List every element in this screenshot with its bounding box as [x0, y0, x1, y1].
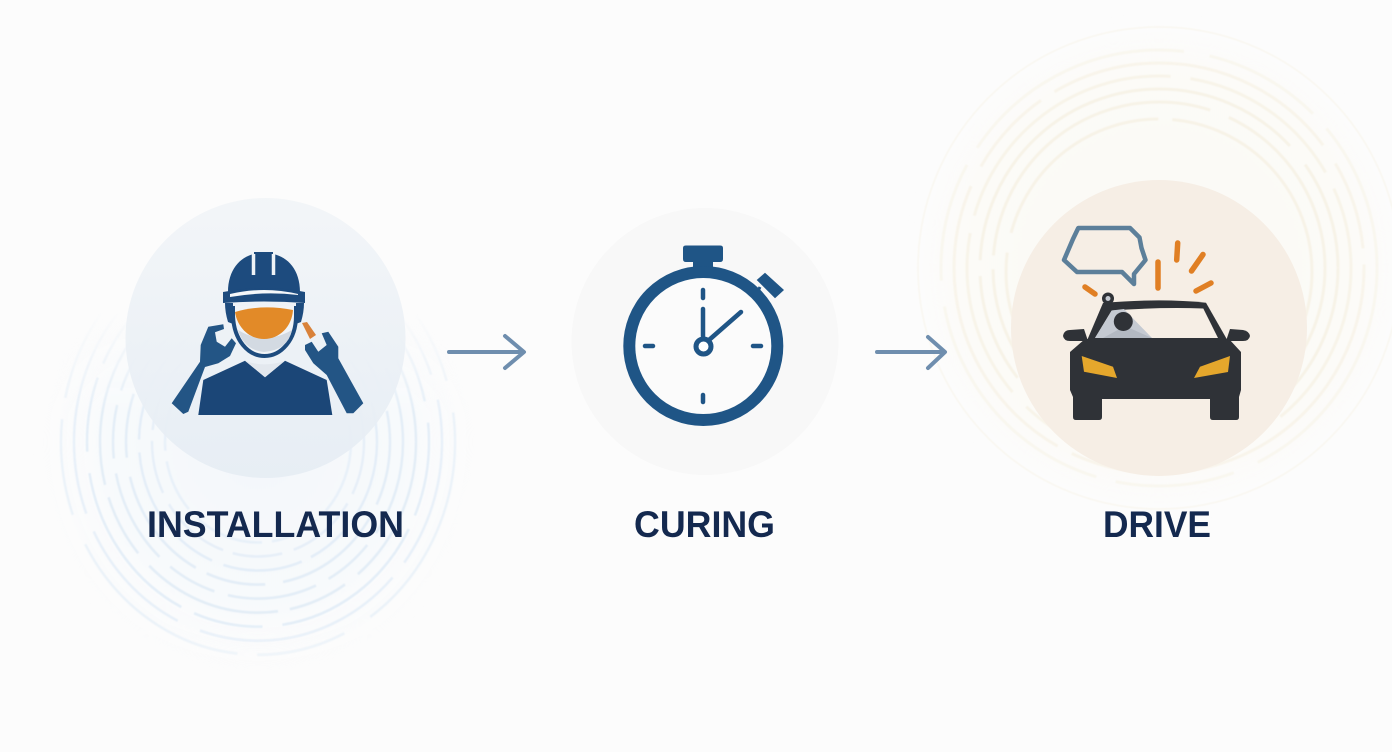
- chin: [238, 330, 292, 352]
- label: installation: INSTALLATION: [147, 504, 404, 545]
- arrow: curing to drive: [877, 337, 945, 368]
- collar: [245, 361, 285, 377]
- helmet: [228, 252, 300, 292]
- ear flaps: [225, 303, 304, 324]
- icon: car with speech bubble: [1063, 228, 1250, 420]
- panel: drive circle: [1011, 180, 1307, 476]
- clock hands: [703, 309, 741, 340]
- arrow: installation to curing: [449, 336, 524, 368]
- pencil: [302, 322, 316, 339]
- label: drive: DRIVE: [1103, 504, 1211, 545]
- car body: [1070, 339, 1241, 420]
- panel: curing circle: [572, 208, 838, 475]
- tick marks: [645, 290, 761, 402]
- right wrench: [305, 332, 363, 413]
- body: [198, 361, 332, 415]
- left wrench: [172, 324, 236, 414]
- head outline: [233, 306, 296, 356]
- car roof and windows: [1083, 300, 1233, 350]
- antenna knob: [1102, 292, 1114, 304]
- orange mask: [235, 307, 293, 339]
- mirrors: [1063, 329, 1088, 341]
- headlights: [1082, 356, 1117, 378]
- speech bubble: [1064, 228, 1146, 284]
- side button: [757, 273, 784, 298]
- signal dashes: [1085, 243, 1211, 294]
- background ripple: drive: [904, 13, 1392, 523]
- icon: worker with wrenches: [172, 252, 363, 415]
- background ripple: installation: [60, 348, 456, 656]
- icon: stopwatch: [629, 246, 784, 420]
- dial: [629, 272, 777, 420]
- helmet brim: [223, 288, 305, 303]
- panel: installation circle: [126, 198, 406, 478]
- crown: [683, 246, 723, 272]
- label: curing: CURING: [634, 504, 775, 545]
